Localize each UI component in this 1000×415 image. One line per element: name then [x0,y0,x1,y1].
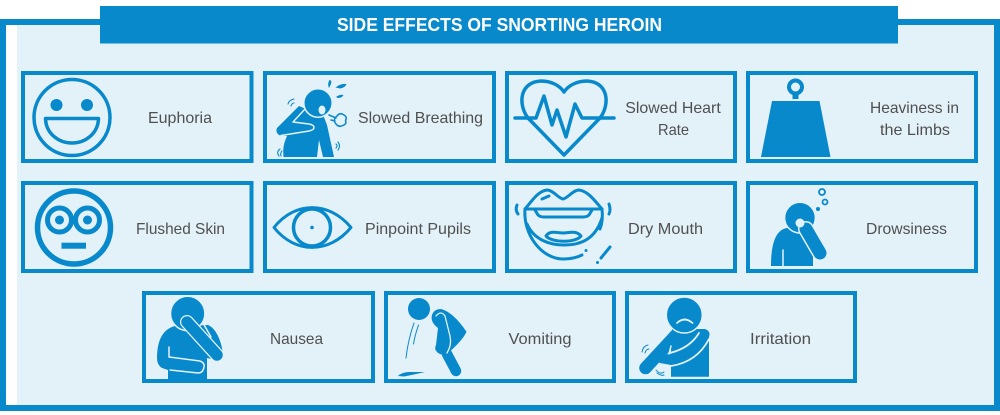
label line 2: the Limbs [880,122,950,139]
panel: dry mouth [507,183,735,271]
icon: weight [761,80,830,157]
panel: irritation [627,293,855,381]
label: Slowed Breathing [358,110,483,127]
panel: slowed breathing [265,73,494,161]
panel: euphoria [23,73,252,161]
panel: pinpoint pupils [265,183,494,271]
icon: person short of breath [276,80,346,157]
icon: eye [274,208,351,247]
icon: person vomiting [398,298,466,376]
panel: flushed skin [23,183,252,271]
panel: slowed heart rate [507,73,735,161]
icon: open mouth [516,190,610,264]
label: Slowed Heart [625,100,721,117]
icon: staring face [38,191,110,264]
icon: smiling face [34,80,110,156]
title banner: SIDE EFFECTS OF SNORTING HEROIN [337,15,662,35]
label: Euphoria [148,110,212,127]
label: Flushed Skin [136,221,225,238]
title banner [100,6,898,44]
panel: drowsiness [748,183,976,271]
label: Irritation [750,331,811,348]
icon: heart with pulse [515,81,614,155]
label line 2: Rate [658,122,689,139]
panel: vomiting [386,293,614,381]
label: Vomiting [508,331,572,348]
icon: person scratching arm [642,297,710,377]
label: Drowsiness [866,221,947,238]
icon: person with nausea [157,296,223,379]
panel: heaviness in the limbs [748,73,976,161]
label: Heaviness in [870,100,959,117]
label: Dry Mouth [628,221,703,238]
label: Nausea [270,331,323,348]
icon: drowsy person [771,189,828,266]
label: Pinpoint Pupils [365,221,471,238]
panel: nausea [144,293,373,381]
